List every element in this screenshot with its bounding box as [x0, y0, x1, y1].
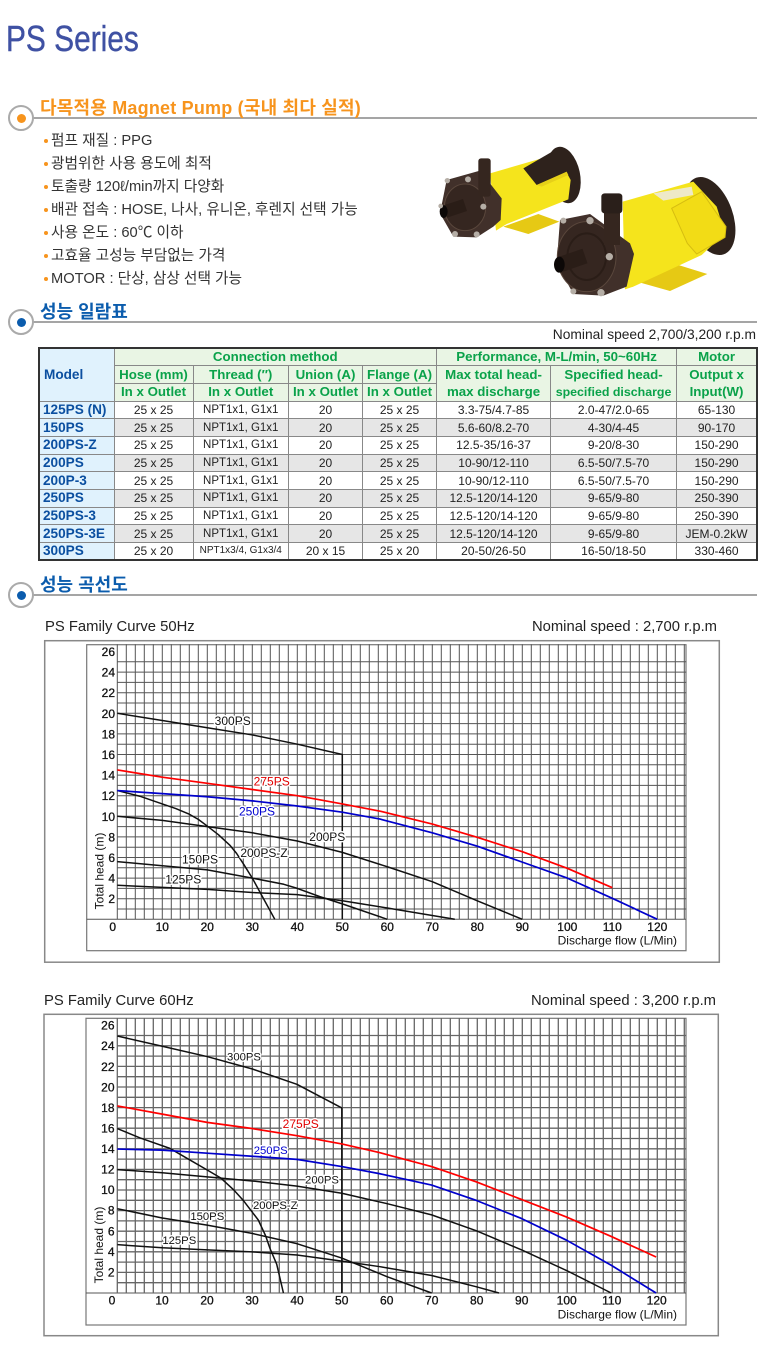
performance table: 20: [319, 438, 332, 452]
performance table: Output x: [689, 367, 744, 382]
performance table: 25 x 25: [134, 456, 173, 470]
curve labels: 125PS: [162, 1235, 197, 1247]
feature list: 사용 온도 : 60℃ 이하: [51, 225, 184, 241]
performance table: Model: [44, 367, 83, 382]
curve labels: 250PS: [239, 804, 275, 818]
performance table: Motor: [698, 349, 735, 364]
feature list: 광범위한 사용 용도에 최적: [51, 156, 212, 172]
performance table: 2.0-47/2.0-65: [578, 403, 649, 417]
performance table: 25 x 25: [134, 438, 173, 452]
curve labels: 275PS: [283, 1117, 319, 1131]
y axis labels: 6: [108, 1224, 115, 1238]
performance table: 125PS (N): [43, 402, 106, 417]
x axis labels: [109, 1294, 667, 1308]
x axis labels: 10: [156, 920, 169, 934]
x axis labels: 0: [109, 1294, 116, 1308]
feature list: 고효율 고성능 부담없는 가격: [51, 248, 225, 264]
x axis labels: 100: [557, 1294, 577, 1308]
axis title: discharge flow: Discharge flow (L/Min): [558, 934, 677, 948]
y axis labels: 22: [102, 686, 115, 700]
performance table: 25 x 25: [134, 474, 173, 488]
y axis labels: 20: [102, 707, 115, 721]
performance table: 6.5-50/7.5-70: [578, 474, 649, 488]
x axis labels: 60: [380, 1294, 394, 1308]
performance table: 20: [319, 474, 332, 488]
performance table: 20: [319, 403, 332, 417]
y axis labels: 12: [101, 1163, 115, 1177]
curve labels: [162, 1051, 339, 1247]
y axis labels: 24: [101, 1039, 115, 1053]
performance table: In x Outlet: [121, 384, 186, 399]
performance table: Input(W): [690, 384, 744, 399]
y axis labels: 10: [102, 810, 115, 824]
chart note: 2,700 rpm: Nominal speed : 2,700 r.p.m: [532, 619, 717, 635]
y axis labels: 20: [101, 1080, 115, 1094]
x axis labels: 60: [381, 920, 394, 934]
curve labels: 125PS: [165, 873, 201, 887]
performance table: 9-65/9-80: [588, 527, 639, 541]
performance table: NPT1x1, G1x1: [203, 457, 278, 469]
product image: two magnet pumps: [438, 146, 736, 296]
curve labels: 150PS: [190, 1211, 225, 1223]
x axis labels: 20: [201, 920, 214, 934]
performance table: 25 x 25: [380, 456, 419, 470]
performance table: 9-20/8-30: [588, 438, 639, 452]
performance table: Max total head-: [445, 367, 542, 382]
performance table: NPT1x1, G1x1: [203, 528, 278, 540]
performance table: Specified head-: [564, 367, 663, 382]
feature list: 배관 접속 : HOSE, 나사, 유니온, 후렌지 선택 가능: [51, 202, 358, 218]
x axis labels: 120: [647, 1294, 667, 1308]
performance table: 25 x 25: [134, 509, 173, 523]
x axis labels: [109, 920, 668, 934]
performance table: 25 x 25: [380, 491, 419, 505]
performance table: 250PS: [43, 490, 84, 505]
performance table: 4-30/4-45: [588, 421, 639, 435]
section heading: performance curves: 성능 곡선도: [40, 575, 128, 595]
performance table: 20-50/26-50: [461, 544, 526, 558]
performance table: In x Outlet: [208, 384, 273, 399]
x axis labels: 90: [516, 920, 529, 934]
performance table: 20: [319, 456, 332, 470]
feature list: 토출량 120ℓ/min까지 다양화: [51, 179, 224, 195]
performance table: 25 x 25: [134, 403, 173, 417]
x axis labels: 110: [603, 920, 622, 934]
performance table: 150PS: [43, 420, 84, 435]
performance table: 20: [319, 491, 332, 505]
performance table: NPT1x1, G1x1: [203, 439, 278, 451]
axis title: discharge flow: Discharge flow (L/Min): [558, 1308, 677, 1322]
y axis labels: 26: [101, 1019, 115, 1033]
performance table: 3.3-75/4.7-85: [458, 403, 529, 417]
curve labels: 200PS: [305, 1174, 339, 1186]
performance table: 330-460: [695, 544, 739, 558]
performance table: NPT1x3/4, G1x3/4: [200, 545, 282, 556]
performance table: 250-390: [695, 491, 739, 505]
section heading: performance table: [8, 302, 757, 335]
x axis labels: 80: [471, 920, 484, 934]
chart: 60Hz family curve: [44, 1014, 718, 1336]
performance table: 10-90/12-110: [458, 456, 529, 470]
performance table: 25 x 20: [380, 544, 419, 558]
performance table: NPT1x1, G1x1: [203, 492, 278, 504]
performance table: specified discharge: [556, 385, 671, 399]
y axis labels: 12: [102, 789, 115, 803]
icon: small pump: [438, 144, 586, 237]
x axis labels: 120: [647, 920, 668, 934]
performance table: 9-65/9-80: [588, 509, 639, 523]
curve labels: 200PS: [309, 830, 345, 844]
performance table: 200P-3: [43, 473, 87, 488]
performance table: 16-50/18-50: [581, 544, 646, 558]
chart title: 50Hz: PS Family Curve 50Hz: [45, 619, 195, 635]
y axis labels: 8: [108, 830, 115, 844]
y axis labels: 14: [101, 1142, 115, 1156]
x axis labels: 100: [557, 920, 578, 934]
performance table: 250PS-3: [43, 508, 96, 523]
performance table: 150-290: [695, 474, 739, 488]
x axis labels: 70: [426, 920, 439, 934]
performance table: max discharge: [447, 384, 540, 399]
performance table: Flange (A): [367, 367, 432, 382]
curves: [117, 1036, 656, 1293]
y axis labels: 26: [102, 645, 115, 659]
x axis labels: 50: [335, 1294, 349, 1308]
x axis labels: 80: [470, 1294, 484, 1308]
feature list: [44, 132, 358, 287]
performance table: NPT1x1, G1x1: [203, 510, 278, 522]
performance table: 150-290: [695, 438, 739, 452]
y axis labels: 8: [108, 1204, 115, 1218]
performance table: 6.5-50/7.5-70: [578, 456, 649, 470]
x axis labels: 110: [602, 1294, 622, 1308]
performance table: 150-290: [695, 456, 739, 470]
performance table: NPT1x1, G1x1: [203, 475, 278, 487]
x axis labels: 30: [246, 920, 259, 934]
performance table: 12.5-120/14-120: [449, 527, 538, 541]
performance table: 20: [319, 527, 332, 541]
y axis labels: [101, 1019, 115, 1279]
curve labels: 300PS: [227, 1051, 261, 1063]
y axis labels: 6: [108, 851, 115, 865]
performance table: 25 x 25: [380, 403, 419, 417]
performance table: 25 x 25: [380, 421, 419, 435]
performance table: 25 x 25: [134, 527, 173, 541]
section heading: magnet pump: 다목적용 Magnet Pump (국내 최다 실적): [40, 98, 361, 118]
x axis labels: 30: [245, 1294, 259, 1308]
performance table: NPT1x1, G1x1: [203, 404, 278, 416]
performance table: 20 x 15: [306, 544, 345, 558]
curve labels: 275PS: [254, 774, 290, 788]
performance table: 250PS-3E: [43, 526, 105, 541]
performance table: 250-390: [695, 509, 739, 523]
curves: [117, 713, 657, 919]
axis title: total head: Total head (m): [92, 833, 106, 909]
y axis labels: 2: [108, 892, 115, 906]
x axis labels: 40: [290, 1294, 304, 1308]
icon: large pump: [554, 170, 745, 296]
y axis labels: 14: [102, 769, 115, 783]
curve labels: 250PS: [254, 1145, 288, 1157]
curve labels: [165, 714, 345, 887]
performance table: Connection method: [213, 349, 338, 364]
section heading: performance table: 성능 일람표: [40, 302, 128, 322]
y axis labels: 4: [108, 1245, 115, 1259]
performance table: In x Outlet: [367, 384, 432, 399]
y axis labels: 18: [102, 727, 115, 741]
performance table: 25 x 20: [134, 544, 173, 558]
performance table: Union (A): [296, 367, 355, 382]
y axis labels: 10: [101, 1183, 115, 1197]
performance table: 9-65/9-80: [588, 491, 639, 505]
x axis labels: 90: [515, 1294, 529, 1308]
performance table: 25 x 25: [134, 491, 173, 505]
performance table: JEM-0.2kW: [686, 527, 748, 541]
performance table: 25 x 25: [380, 474, 419, 488]
axis title: total head: Total head (m): [92, 1207, 106, 1283]
performance table: 90-170: [698, 421, 735, 435]
performance table: 25 x 25: [380, 527, 419, 541]
performance table: 300PS: [43, 543, 84, 558]
performance table: 200PS-Z: [43, 437, 97, 452]
performance table: 12.5-120/14-120: [449, 509, 538, 523]
x axis labels: 50: [336, 920, 349, 934]
y axis labels: 22: [101, 1060, 115, 1074]
curve labels: 200PS-Z: [240, 846, 288, 860]
y axis labels: [102, 645, 115, 906]
performance table: 20: [319, 509, 332, 523]
performance table: 20: [319, 421, 332, 435]
chart: 50Hz family curve: [45, 641, 719, 962]
performance table: NPT1x1, G1x1: [203, 422, 278, 434]
title: PS Series: [6, 18, 139, 59]
performance table: Performance, M-L/min, 50~60Hz: [456, 349, 657, 364]
y axis labels: 24: [102, 666, 115, 680]
performance table: 5.6-60/8.2-70: [458, 421, 529, 435]
feature list: MOTOR : 단상, 삼상 선택 가능: [51, 271, 242, 287]
note: nominal speed: Nominal speed 2,700/3,200 r.p.m: [553, 327, 756, 342]
y axis labels: 18: [101, 1101, 115, 1115]
performance table: 25 x 25: [380, 509, 419, 523]
y axis labels: 16: [101, 1122, 115, 1136]
y axis labels: 16: [102, 748, 115, 762]
performance table: 10-90/12-110: [458, 474, 529, 488]
section heading: performance curves: [8, 575, 757, 608]
performance table: 65-130: [698, 403, 735, 417]
x axis labels: 0: [109, 920, 116, 934]
performance table: 25 x 25: [134, 421, 173, 435]
y axis labels: 4: [108, 872, 115, 886]
y axis labels: 2: [108, 1265, 115, 1279]
performance table: In x Outlet: [293, 384, 358, 399]
performance table: [38, 347, 758, 561]
x axis labels: 70: [425, 1294, 439, 1308]
performance table: Hose (mm): [119, 367, 188, 382]
performance table: 12.5-120/14-120: [449, 491, 538, 505]
x axis labels: 40: [291, 920, 304, 934]
chart note: 3,200 rpm: Nominal speed : 3,200 r.p.m: [531, 993, 716, 1009]
x axis labels: 10: [155, 1294, 169, 1308]
curve labels: 200PS-Z: [253, 1200, 298, 1212]
curve labels: 150PS: [182, 853, 218, 867]
curve labels: 300PS: [215, 714, 251, 728]
performance table: 12.5-35/16-37: [456, 438, 531, 452]
x axis labels: 20: [200, 1294, 214, 1308]
chart title: 60Hz: PS Family Curve 60Hz: [44, 993, 194, 1009]
performance table: 25 x 25: [380, 438, 419, 452]
feature list: 펌프 재질 : PPG: [51, 133, 152, 149]
performance table: Thread (″): [209, 367, 272, 382]
performance table: 200PS: [43, 455, 84, 470]
section heading: magnet pump: [8, 98, 757, 131]
